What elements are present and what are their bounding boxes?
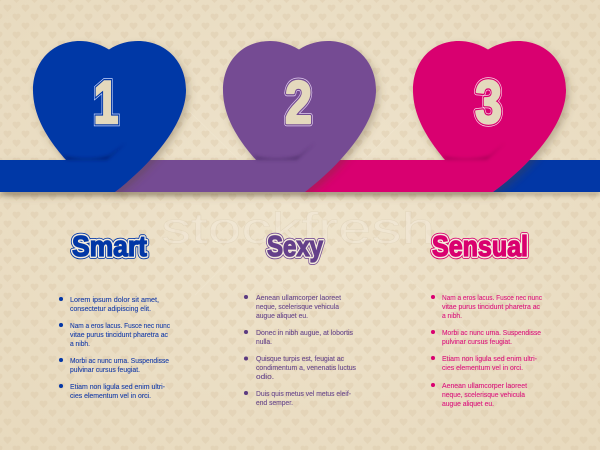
heading: Smart: Smart bbox=[72, 231, 147, 263]
fold shadow heart 1 bbox=[63, 143, 126, 160]
bullet list: Sensual: Nam a eros lacus. Fusce nec nunc bbox=[442, 293, 542, 302]
bullet list: Smart: vitae purus tincidunt pharetra ac bbox=[70, 330, 168, 339]
column 1: Smart bbox=[59, 231, 170, 400]
bullet list: Sexy: neque, scelerisque vehicula bbox=[256, 302, 340, 311]
bullet list: Sensual: Etiam non ligula sed enim ultri- bbox=[442, 354, 537, 363]
heading: Sensual: Sensual bbox=[432, 231, 528, 263]
bullet list: Sensual: cies elementum vel in orci. bbox=[442, 363, 523, 372]
ribbon: blue right end bbox=[480, 160, 600, 192]
bullet list: Sensual: pulvinar cursus feugiat. bbox=[442, 337, 512, 346]
bullet list: Sensual: vitae purus tincidunt pharetra ac bbox=[442, 302, 540, 311]
number 1: 1 bbox=[94, 69, 118, 136]
bullet list: Sexy: Donec in nibh augue, at lobortis bbox=[256, 328, 353, 337]
bullet list: Smart: cies elementum vel in orci. bbox=[70, 391, 151, 400]
bullet list: Sensual: Morbi ac nunc urna. Suspendisse bbox=[442, 328, 541, 337]
bullet list: Sexy: condimentum a, venenatis luctus bbox=[256, 363, 356, 372]
number 2: 2 bbox=[285, 69, 312, 136]
fold shadow heart 2 bbox=[253, 143, 315, 160]
number 1: 1 bbox=[94, 69, 118, 136]
bullet list: Sexy: Aenean ullamcorper laoreet bbox=[256, 293, 341, 302]
heart 1 with ribbon bbox=[0, 41, 186, 192]
watermark: stockfresh bbox=[161, 204, 435, 253]
bullet list: Sensual: augue aliquet eu. bbox=[442, 399, 494, 408]
heading: Smart: Smart bbox=[72, 231, 147, 263]
number 2: 2 bbox=[285, 69, 312, 136]
heart 2 with ribbon bbox=[110, 41, 376, 192]
bullet list: Sexy: Quisque turpis est, feugiat ac bbox=[256, 354, 344, 363]
column 2: Sexy bbox=[244, 231, 356, 407]
heading: Sensual: Sensual bbox=[432, 231, 528, 263]
bullet list: Smart: Morbi ac nunc urna. Suspendisse bbox=[70, 356, 169, 365]
bullet list: Sexy bbox=[244, 293, 356, 407]
bullet list: Sensual bbox=[431, 293, 542, 408]
heading: Smart: Smart bbox=[72, 231, 147, 263]
bullet list: Smart: Etiam non ligula sed enim ultri- bbox=[70, 382, 165, 391]
bullet list: Sexy: odio. bbox=[256, 372, 274, 381]
column 3: Sensual bbox=[431, 231, 542, 408]
bullet list: Sexy: nulla. bbox=[256, 337, 272, 346]
heart 3 with ribbon bbox=[300, 41, 566, 192]
heading: Sexy: Sexy bbox=[267, 231, 323, 263]
bullet list: Smart: Nam a eros lacus. Fusce nec nunc bbox=[70, 321, 170, 330]
bullet list: Smart: pulvinar cursus feugiat. bbox=[70, 365, 140, 374]
number 3: 3 bbox=[475, 69, 502, 136]
bullet list: Sensual: a nibh. bbox=[442, 311, 462, 320]
number 3: 3 bbox=[475, 69, 502, 136]
bullet list: Sexy: augue aliquet eu. bbox=[256, 311, 308, 320]
number 3: 3 bbox=[475, 69, 502, 136]
ribbon shadow bbox=[0, 191, 600, 195]
bullet list: Sexy: end semper. bbox=[256, 398, 293, 407]
bullet list: Sexy: Duis quis metus vel metus eleif- bbox=[256, 389, 351, 398]
bullet list: Sensual: Aenean ullamcorper laoreet bbox=[442, 381, 527, 390]
bullet list: Sensual: neque, scelerisque vehicula bbox=[442, 390, 526, 399]
bullet list: Smart bbox=[59, 295, 170, 400]
bullet list: Smart: consectetur adipiscing elit. bbox=[70, 304, 151, 313]
number 1: 1 bbox=[94, 69, 118, 136]
heading: Sensual: Sensual bbox=[432, 231, 528, 263]
bullet list: Smart: Lorem ipsum dolor sit amet, bbox=[70, 295, 159, 304]
heading: Sexy: Sexy bbox=[267, 231, 323, 263]
number 2: 2 bbox=[285, 69, 312, 136]
heading: Sexy: Sexy bbox=[267, 231, 323, 263]
bullet list: Smart: a nibh. bbox=[70, 339, 90, 348]
fold shadow heart 3 bbox=[442, 143, 505, 160]
